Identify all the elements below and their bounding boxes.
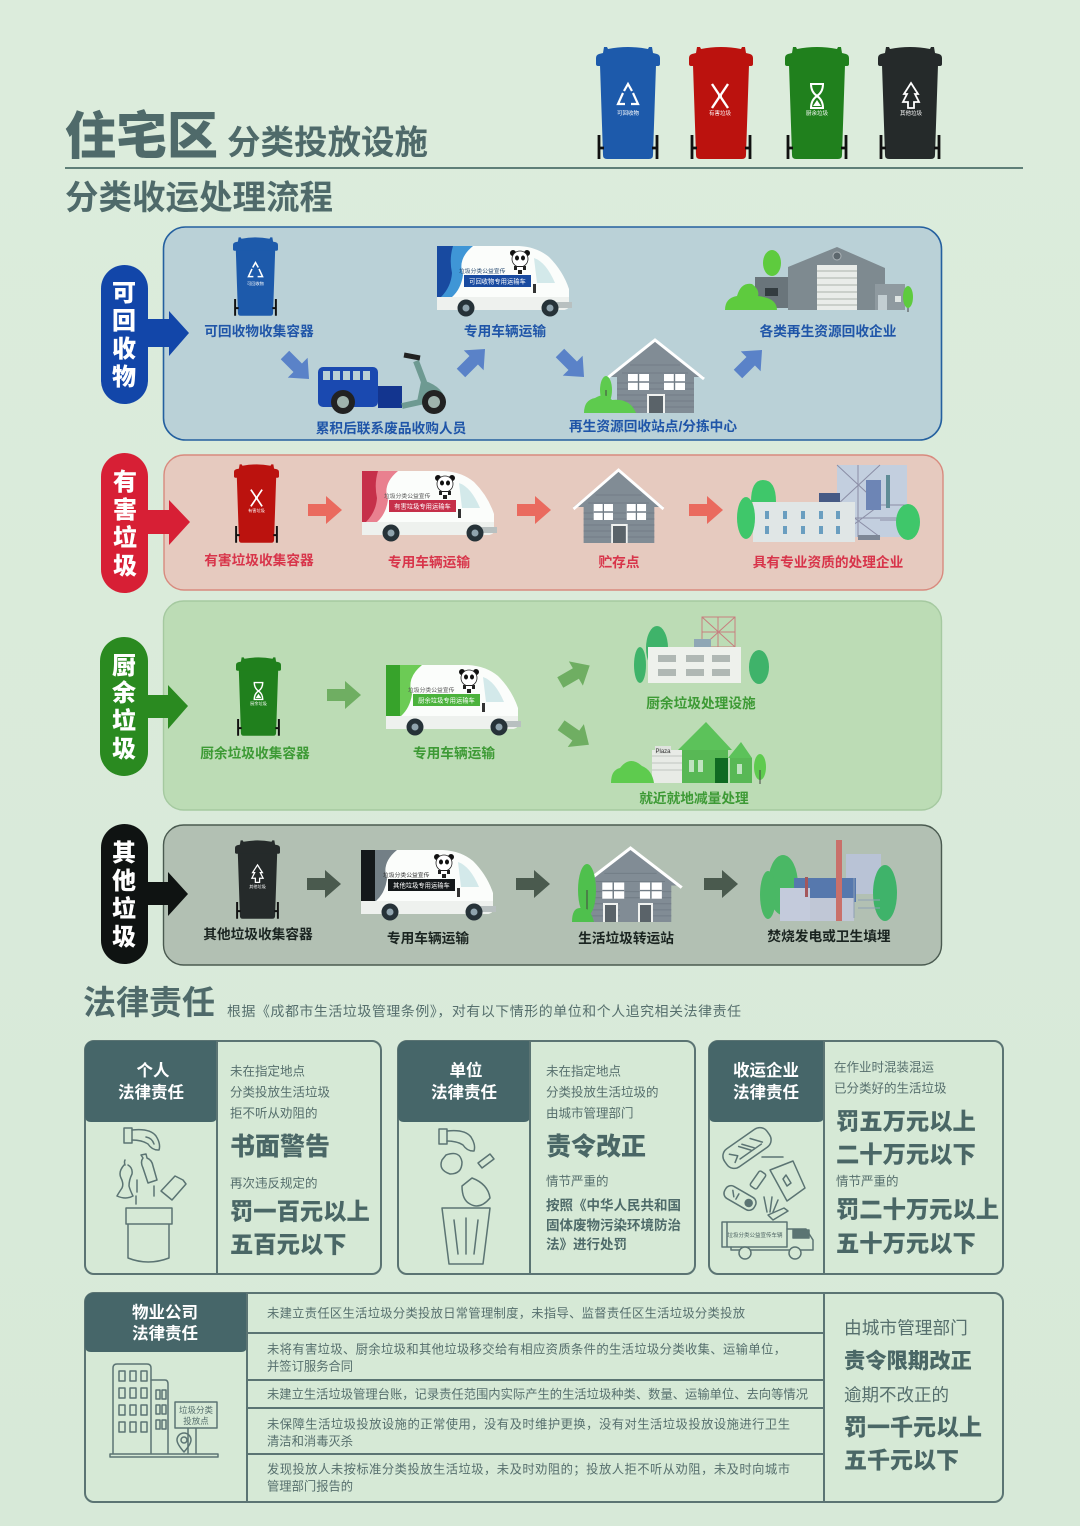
- label: other waste bin: 其他垃圾收集容器: [203, 926, 313, 942]
- text: property company violations: [267, 1306, 808, 1494]
- panel: individual liability: 个人: [136, 1061, 170, 1080]
- panel: property company liability: 物业公司: [132, 1303, 198, 1322]
- icon: other waste bin: 其他垃圾: [249, 883, 267, 890]
- tag: hazardous waste: 害: [113, 496, 137, 524]
- text: property company violations: 管理部门报告的: [267, 1478, 353, 1494]
- icon: recycling enterprise: [725, 247, 913, 312]
- label: sorting center: 再生资源回收站点/分拣中心: [569, 418, 737, 434]
- panel: property company liability: 法律责任: [132, 1324, 198, 1343]
- tag: recyclables: 回: [112, 308, 136, 335]
- title: 住宅区: [65, 108, 218, 165]
- text: organization rules: 由城市管理部门: [546, 1106, 634, 1120]
- label: hazardous bin: 有害垃圾收集容器: [204, 552, 314, 568]
- text: property company penalties: 逾期不改正的: [844, 1385, 949, 1405]
- panel: other waste: [101, 824, 942, 965]
- icon: incineration plant: [760, 840, 897, 921]
- tag: recyclables: [101, 265, 189, 404]
- label: incineration or landfill: 焚烧发电或卫生填埋: [767, 928, 891, 944]
- text: individual rules: 未在指定地点: [230, 1064, 305, 1078]
- text: property company violations: 未建立生活垃圾管理台账，记录责任范围内实际产生的生活垃圾种类、数量、运输单位、去向等情况: [267, 1386, 808, 1402]
- text: individual rules: 五百元以下: [230, 1232, 346, 1258]
- label: recycler: 各类再生资源回收企业: [760, 323, 897, 339]
- panel: organization liability: [398, 1041, 695, 1274]
- icon: kitchen waste van: 厨余垃圾专用运输车: [418, 696, 475, 705]
- icon: other waste van: 其他垃圾专用运输车: [393, 881, 450, 890]
- icon: kitchen waste van: [386, 665, 521, 736]
- arrow: to van: [308, 496, 342, 524]
- label: transfer station: 生活垃圾转运站: [578, 930, 674, 946]
- icon: hazardous van: 有害垃圾专用运输车: [394, 502, 451, 511]
- text: individual rules: 拒不听从劝阻的: [230, 1106, 318, 1120]
- panel: property company liability: [85, 1293, 1003, 1502]
- arrow: to on-site treatment: [553, 714, 597, 756]
- title: [65, 108, 428, 165]
- arrow: to collector: [275, 345, 319, 389]
- text: property company violations: 并签订服务合同: [267, 1358, 353, 1374]
- label: on-site reduction: 就近就地减量处理: [639, 790, 749, 806]
- text: organization rules: 按照《中华人民共和国: [546, 1197, 681, 1213]
- icon: recyclables bin: 可回收物: [247, 280, 264, 287]
- text: organization rules: 情节严重的: [546, 1174, 609, 1188]
- icon: hazardous bin: [234, 464, 279, 543]
- label: collector: 累积后联系废品收购人员: [316, 420, 467, 436]
- text: property company penalties: [844, 1318, 982, 1473]
- icon: kitchen waste bin: [236, 657, 281, 736]
- icon: tricycle: [318, 355, 446, 414]
- panel: individual liability: 法律责任: [118, 1083, 184, 1102]
- icon: kitchen waste facility: [634, 617, 769, 684]
- icon: other waste bin: [235, 840, 280, 919]
- tag: other waste: 垃: [112, 895, 136, 923]
- tag: other waste: 他: [112, 868, 136, 895]
- panel: hazardous waste: [101, 453, 943, 593]
- icon: recyclables van: 垃圾分类公益宣传: [459, 267, 506, 275]
- text: hauling company rules: 在作业时混装混运: [834, 1060, 935, 1074]
- arrow: to transfer station: [516, 870, 550, 898]
- icon: four sorted waste bins: 有害垃圾: [709, 109, 731, 117]
- label: van: 专用车辆运输: [388, 554, 470, 570]
- text: property company violations: 发现投放人未按标准分类投放生活垃圾，未及时劝阻的；投放人拒不听从劝阻，未及时向城市: [267, 1462, 790, 1476]
- icon: kitchen waste bin: 厨余垃圾: [250, 700, 268, 707]
- icon: hazardous van: 垃圾分类公益宣传: [384, 492, 431, 500]
- text: organization rules: 固体废物污染环境防治: [546, 1217, 681, 1233]
- text: hauling company rules: 罚二十万元以上: [836, 1196, 999, 1222]
- icon: recyclables van: [437, 246, 572, 316]
- text: hauling company rules: 罚五万元以上: [836, 1108, 976, 1134]
- icon: four sorted waste bins: 厨余垃圾: [806, 109, 828, 117]
- text: property company penalties: 责令限期改正: [844, 1348, 972, 1373]
- tag: kitchen waste: 垃: [112, 707, 136, 735]
- text: property company penalties: 由城市管理部门: [844, 1318, 968, 1338]
- title: 分类投放设施: [227, 125, 428, 162]
- arrow: to vehicle: [451, 339, 495, 383]
- tag: kitchen waste: 余: [112, 679, 136, 707]
- tag: hazardous waste: 有: [113, 469, 137, 496]
- panel: hauling company liability: [709, 1041, 1003, 1274]
- label: van: 专用车辆运输: [413, 745, 495, 761]
- label: storage: 贮存点: [598, 554, 640, 570]
- text: individual rules: 再次违反规定的: [230, 1176, 318, 1190]
- arrow: to recycler: [728, 340, 772, 384]
- text: organization rules: 分类投放生活垃圾的: [546, 1084, 659, 1100]
- panel: property company liability: 垃圾分类: [179, 1405, 213, 1415]
- icon: on-site reduction building: [611, 722, 766, 784]
- icon: on-site reduction building: Plaza: [655, 749, 671, 755]
- panel: hauling company liability: 垃圾分类公益宣传车辆: [727, 1231, 783, 1239]
- text: organization rules: 未在指定地点: [546, 1064, 621, 1078]
- icon: hazardous bin: 有害垃圾: [248, 507, 266, 514]
- text: property company violations: 清洁和消毒灭杀: [267, 1434, 353, 1448]
- label: kitchen waste facility: 厨余垃圾处理设施: [646, 695, 756, 711]
- text: hauling company rules: 情节严重的: [836, 1174, 899, 1188]
- arrow: to treatment: [689, 496, 723, 524]
- icon: hazardous van: [362, 471, 497, 542]
- tag: recyclables: 可: [112, 280, 136, 307]
- arrow: to sorting center: [550, 343, 594, 387]
- heading: legal liability: 法律责任: [83, 984, 215, 1021]
- text: legal basis: 根据《成都市生活垃圾管理条例》，对有以下情形的单位和个人追究相关法律责任: [227, 1003, 741, 1019]
- text: hauling company rules: 五十万元以下: [836, 1230, 976, 1256]
- label: recyclables bin: 可回收物收集容器: [204, 323, 314, 339]
- label: kitchen waste bin: 厨余垃圾收集容器: [200, 745, 310, 761]
- panel: organization liability: 单位: [450, 1060, 482, 1080]
- text: property company violations: 未保障生活垃圾投放设施的正常使用，没有及时维护更换，没有对生活垃圾投放设施进行卫生: [267, 1416, 790, 1432]
- icon: storage house: [574, 469, 663, 543]
- icon: other waste van: 垃圾分类公益宣传: [383, 871, 430, 879]
- icon: sorting station house: [584, 339, 704, 413]
- panel: individual liability: [85, 1041, 381, 1274]
- tag: hazardous waste: 圾: [113, 553, 137, 580]
- icon: four sorted waste bins: [596, 47, 942, 159]
- label: van: 专用车辆运输: [464, 323, 546, 339]
- label: treatment enterprise: 具有专业资质的处理企业: [753, 554, 904, 570]
- tag: recyclables: 物: [112, 364, 136, 391]
- icon: hand dropping litter into bin: [439, 1129, 494, 1264]
- arrow: to storage: [517, 496, 551, 524]
- text: individual rules: 分类投放生活垃圾: [230, 1084, 331, 1100]
- icon: recyclables bin: [233, 237, 278, 316]
- panel: hauling company liability: 收运企业: [733, 1060, 799, 1080]
- text: organization rules: 法》进行处罚: [546, 1236, 627, 1252]
- icon: hand dropping litter into cup: [117, 1128, 186, 1262]
- icon: other waste van: [361, 850, 496, 920]
- text: individual rules: 书面警告: [230, 1133, 330, 1161]
- panel: kitchen waste: [100, 601, 942, 810]
- icon: residential buildings and drop-off sign: [110, 1364, 218, 1457]
- icon: kitchen waste van: 垃圾分类公益宣传: [408, 686, 455, 694]
- label: van: 专用车辆运输: [387, 930, 469, 946]
- panel: organization liability: 法律责任: [431, 1083, 497, 1102]
- tag: hazardous waste: 垃: [113, 524, 137, 552]
- text: organization rules: [546, 1064, 681, 1252]
- icon: four sorted waste bins: 可回收物: [617, 109, 639, 117]
- text: hauling company rules: [834, 1060, 999, 1256]
- text: individual rules: [230, 1064, 370, 1258]
- arrow: to treatment facility: [553, 653, 597, 695]
- icon: truck collecting mixed waste: [719, 1124, 813, 1259]
- tag: hazardous waste: [101, 453, 190, 593]
- text: hauling company rules: 已分类好的生活垃圾: [834, 1080, 947, 1096]
- arrow: to van: [327, 681, 361, 709]
- icon: hazardous treatment enterprise: [737, 465, 920, 542]
- icon: transfer station house: [572, 847, 682, 922]
- arrow: to van: [307, 870, 341, 898]
- arrow: to incineration: [704, 870, 738, 898]
- text: hauling company rules: 二十万元以下: [836, 1142, 976, 1168]
- text: property company violations: 未将有害垃圾、厨余垃圾和其他垃圾移交给有相应资质条件的生活垃圾分类收集、运输单位，: [267, 1342, 786, 1356]
- heading: collection and transport process: 分类收运处理流程: [65, 180, 333, 217]
- tag: other waste: 圾: [112, 924, 136, 951]
- panel: hauling company liability: 法律责任: [733, 1083, 799, 1102]
- tag: other waste: [101, 824, 188, 964]
- text: organization rules: 责令改正: [546, 1132, 646, 1161]
- icon: recyclables van: 可回收物专用运输车: [469, 277, 526, 286]
- text: property company penalties: 五千元以下: [844, 1447, 959, 1473]
- panel: recyclables: [101, 227, 942, 440]
- text: property company penalties: 罚一千元以上: [844, 1414, 982, 1440]
- tag: kitchen waste: 厨: [112, 653, 136, 680]
- tag: recyclables: 收: [112, 336, 136, 363]
- tag: kitchen waste: 圾: [112, 736, 136, 763]
- tag: kitchen waste: [100, 637, 188, 776]
- text: individual rules: 罚一百元以上: [230, 1198, 370, 1224]
- panel: property company liability: 投放点: [183, 1416, 209, 1426]
- icon: four sorted waste bins: 其他垃圾: [900, 109, 922, 117]
- text: property company violations: 未建立责任区生活垃圾分类投放日常管理制度，未指导、监督责任区生活垃圾分类投放: [267, 1306, 745, 1320]
- tag: other waste: 其: [112, 840, 136, 867]
